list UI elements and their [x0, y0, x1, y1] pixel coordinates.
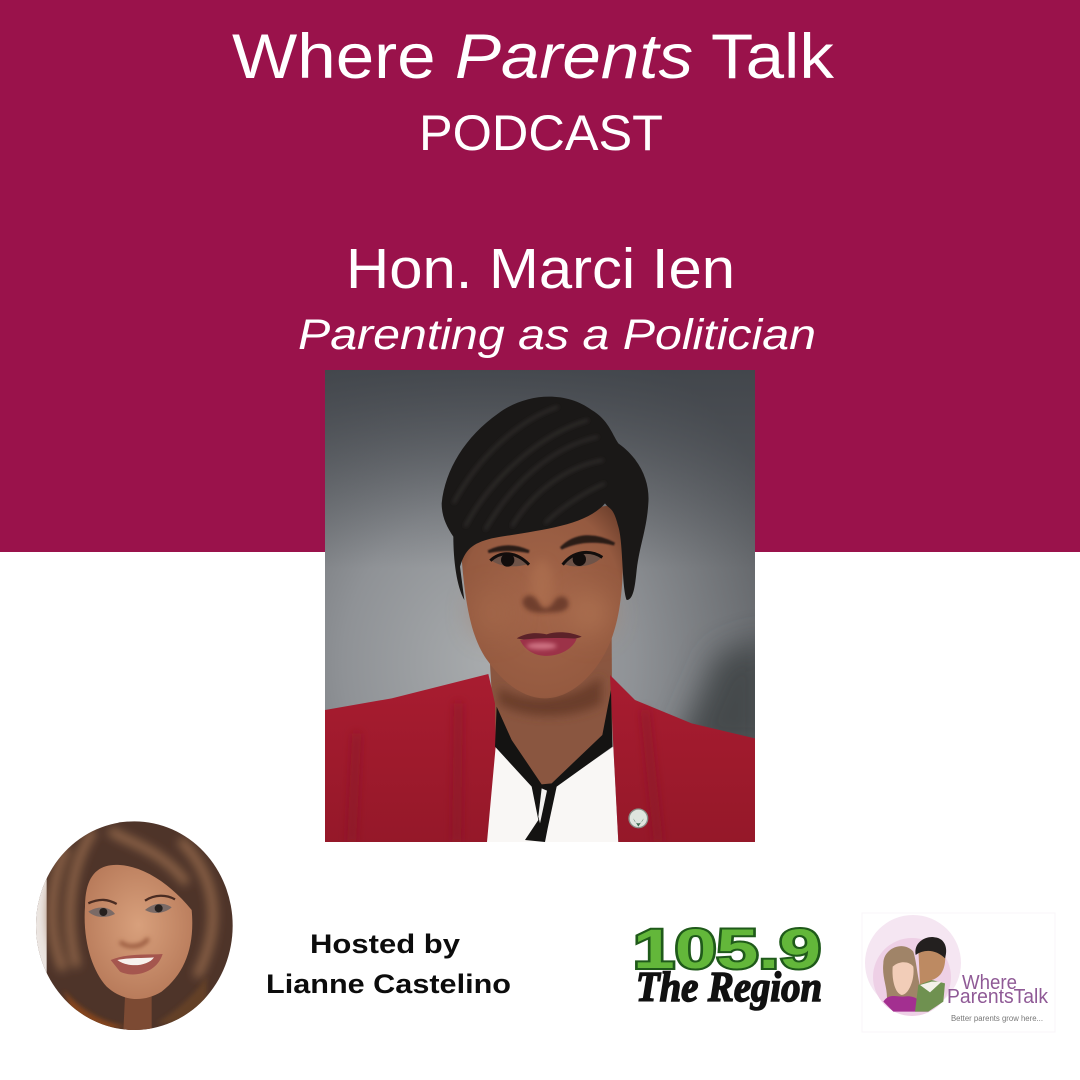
black collar tie	[495, 690, 612, 842]
jacket left	[325, 674, 496, 842]
hosted by credit: Hosted by	[310, 929, 460, 959]
logo: Where Parents Talk: Better parents grow here...	[951, 1014, 1043, 1023]
nose	[522, 595, 569, 613]
subtitle: PODCAST: PODCAST	[419, 105, 663, 161]
logo: 105.9 The Region	[633, 917, 822, 1011]
hosted by credit	[266, 929, 511, 999]
logo: Where Parents Talk	[862, 913, 1055, 1032]
hosted by credit: Lianne Castelino	[266, 969, 511, 999]
hair lights	[52, 830, 213, 977]
face	[460, 503, 623, 698]
guest name: Hon. Marci Ien	[346, 237, 735, 301]
mouth	[111, 954, 163, 974]
host portrait photo	[33, 820, 240, 1033]
guest portrait photo	[325, 370, 772, 842]
title: Where Parents Talk: Where Parents Talk	[232, 22, 835, 92]
wordmark: Where	[962, 972, 1017, 994]
logo: 105.9 The Region: The Region	[636, 965, 822, 1011]
couple illustration	[883, 937, 946, 1012]
face	[85, 865, 192, 999]
hair	[442, 397, 649, 600]
logo: Where Parents Talk: ParentsTalk	[947, 986, 1049, 1008]
neck	[488, 637, 612, 788]
eyes	[492, 556, 526, 566]
lips	[516, 632, 582, 640]
blouse	[487, 745, 618, 842]
maroon header panel	[0, 0, 1080, 552]
nose shadow	[120, 938, 148, 946]
jacket right	[610, 675, 755, 842]
eyes	[88, 907, 115, 917]
neck	[124, 996, 152, 1030]
lapel pin	[629, 809, 648, 828]
episode topic: Parenting as a Politician	[298, 311, 816, 359]
logo: 105.9 The Region: 105.9	[633, 917, 821, 980]
eyebrows	[488, 537, 614, 552]
